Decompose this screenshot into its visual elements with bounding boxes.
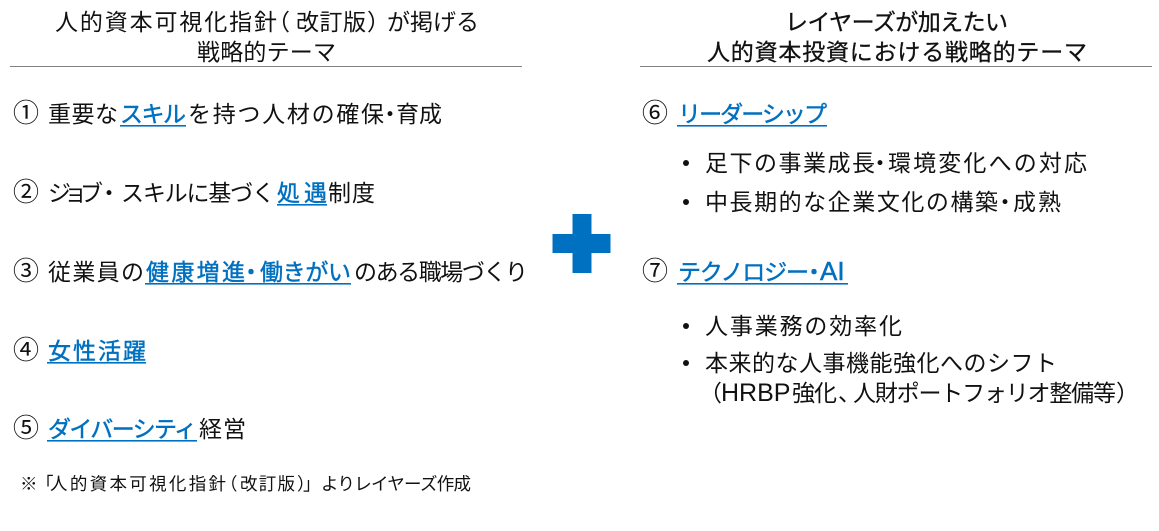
item 3: のある職場づくり — [354, 259, 528, 285]
footnote: （ — [220, 474, 238, 494]
item 6 bullet 1 — [683, 150, 1087, 176]
heading: left column title: ） — [367, 9, 390, 35]
item 7 bullet 2 continuation: 、 — [838, 380, 861, 406]
item 7 bullet 2 continuation: ） — [1116, 380, 1139, 406]
item 1 — [13, 98, 442, 128]
item 6 bullet 2: 成熟 — [1013, 189, 1061, 215]
item 2: 制度 — [328, 180, 375, 206]
heading: left column title: が掲げる — [387, 9, 479, 35]
item 2: スキルに基づく — [121, 180, 275, 206]
item 7 bullet 1: 人事業務の効率化 — [705, 313, 902, 339]
footnote: 」 — [303, 474, 320, 494]
item 2: ・ — [98, 180, 120, 206]
item 1: ・ — [378, 101, 402, 127]
item 6 heading: リーダーシップ — [678, 101, 827, 127]
footnote — [20, 474, 471, 494]
item 3: 従業員の — [48, 259, 144, 285]
heading: left column title: 戦略的テーマ — [197, 39, 336, 65]
item 6 bullet 1: ・ — [868, 150, 892, 176]
icon: plus sign — [552, 214, 610, 273]
item 7 heading: ・ — [802, 259, 826, 285]
item 7 bullet 2: 本来的な人事機能強化へのシフト — [705, 350, 1057, 376]
item 2: ② — [13, 177, 39, 207]
item 6 heading: ⑥ — [642, 98, 668, 128]
item 1: スキル — [120, 101, 186, 127]
item 3 — [13, 256, 528, 286]
item 7 heading: ⑦ — [642, 256, 668, 286]
heading: right column title — [707, 9, 1087, 65]
item 7 heading — [642, 256, 848, 286]
item 3: ・ — [240, 259, 262, 285]
heading: left column title — [55, 9, 479, 65]
item 1: 育成 — [396, 101, 442, 127]
footnote: 改訂版 — [240, 474, 296, 494]
item 4: 女性活躍 — [48, 338, 146, 364]
heading: left column title: （ — [267, 9, 290, 35]
item 7 bullet 2 continuation: 強化 — [792, 380, 837, 406]
item 3: 健康増進 — [146, 259, 245, 285]
item 1: ① — [13, 98, 39, 128]
item 7 heading: テクノロジー — [678, 259, 809, 285]
item 6 bullet 1: 足下の事業成長 — [705, 150, 875, 176]
item 7 heading: AI — [820, 256, 845, 286]
item 1: を持つ人材の確保 — [188, 101, 384, 127]
panel: left theme list — [13, 98, 528, 443]
heading: right column title: レイヤーズが加えたい — [785, 9, 1008, 35]
footnote: 「 — [36, 474, 54, 494]
item 7 bullet 2 continuation: 人財ポートフォリオ整備等 — [853, 380, 1116, 406]
item 4 — [13, 335, 146, 365]
item 7 bullet 2 continuation — [699, 379, 1139, 407]
heading: left column title: 人的資本可視化指針 — [55, 9, 277, 35]
item 4: ④ — [13, 335, 39, 365]
item 3: 働きがい — [260, 259, 351, 285]
item 7 bullet 2 continuation: HRBP — [721, 379, 790, 407]
item 6 bullet 2: ・ — [994, 189, 1016, 215]
item 5: ダイバーシティ — [48, 416, 197, 442]
item 5: 経営 — [199, 416, 246, 442]
panel: right theme list — [642, 98, 1139, 407]
item 1: 重要な — [48, 101, 118, 127]
item 6 bullet 1: 環境変化への対応 — [888, 150, 1087, 176]
item 5: ⑤ — [13, 413, 39, 443]
item 3: ③ — [13, 256, 39, 286]
item 6 heading — [642, 98, 827, 128]
item 5 — [13, 413, 246, 443]
footnote: ） — [297, 474, 314, 494]
heading: right column title: 人的資本投資における戦略的テーマ — [707, 39, 1087, 65]
heading: left column title: 改訂版 — [296, 9, 366, 35]
item 2 — [13, 177, 375, 207]
footnote: よりレイヤーズ作成 — [321, 474, 471, 494]
item 6 bullet 2: 中長期的な企業文化の構築 — [705, 189, 998, 215]
item 2: 処遇 — [277, 180, 327, 206]
footnote: ※ — [20, 474, 38, 494]
item 2: ジョブ — [48, 180, 103, 206]
footnote: 人的資本可視化指針 — [50, 474, 226, 494]
item 7 bullet 2 continuation: （ — [699, 380, 722, 406]
